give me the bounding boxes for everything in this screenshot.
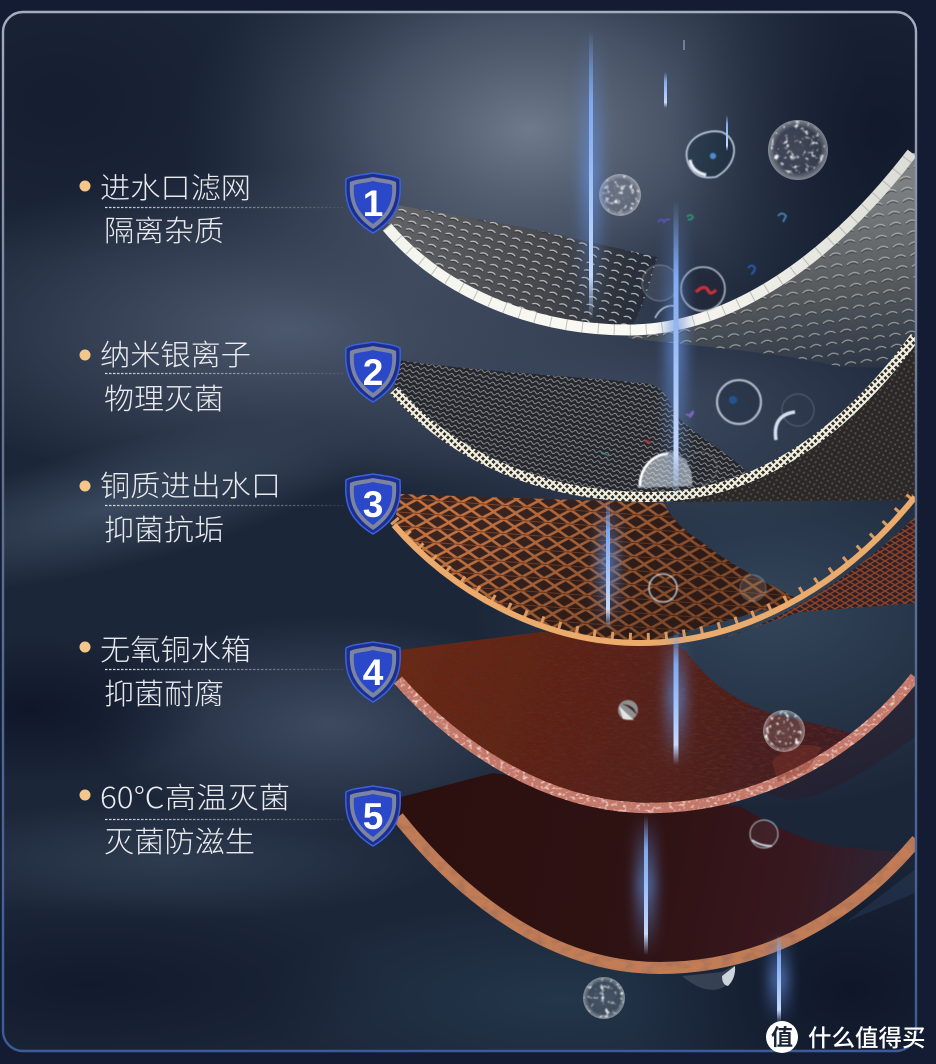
bullet — [80, 480, 90, 492]
description: 隔离杂质 — [104, 208, 224, 250]
bullet — [80, 180, 90, 192]
layer 1 edge — [387, 153, 912, 330]
heading: 无氧铜水箱 — [100, 627, 251, 669]
beam 2 — [666, 200, 686, 500]
bubble: ring on liner — [750, 820, 778, 848]
badge 2: 2 — [363, 352, 383, 393]
layer 2 right mesh — [660, 340, 917, 502]
layer 3: copper inlet and outlet mesh — [394, 492, 917, 645]
bubble: on copper mesh — [649, 574, 766, 602]
layer 4 edge — [398, 677, 915, 808]
badge 5 — [346, 786, 400, 846]
badge 4: 4 — [363, 652, 384, 693]
beam 6 — [769, 935, 789, 1023]
watermark icon — [766, 1021, 798, 1053]
leader line — [105, 206, 345, 208]
layer 1 underside mesh — [628, 153, 917, 368]
layer 1: inlet filter — [387, 153, 912, 332]
item 5 — [80, 775, 345, 861]
beam 1 — [581, 30, 601, 320]
description: 抑菌抗垢 — [104, 507, 224, 549]
heading: 纳米银离子 — [100, 332, 251, 374]
beam 5 — [636, 815, 656, 955]
item 3 — [80, 463, 345, 549]
bubble: textured on copper sheet — [763, 710, 805, 752]
heading: 铜质进出水口 — [100, 463, 281, 505]
badge 2 — [346, 342, 400, 402]
layer 2: nano silver mesh — [394, 337, 915, 497]
watermark — [766, 1021, 926, 1053]
layer 3 edge — [394, 497, 915, 643]
bubble: top center — [599, 174, 641, 216]
beam 3 — [598, 500, 618, 628]
badge 3 — [346, 474, 400, 534]
heading: 进水口滤网 — [100, 165, 251, 207]
droplet below liner — [722, 966, 735, 986]
item 2 — [80, 332, 345, 418]
layer 4 underside — [760, 682, 917, 800]
description: 灭菌防滋生 — [104, 819, 255, 861]
layer 1 perforation — [387, 205, 657, 332]
leader line — [105, 818, 345, 820]
layer 4: oxygen-free copper tank — [398, 632, 917, 808]
short beam top — [664, 40, 728, 151]
layer 3 right mesh — [716, 515, 917, 640]
beam 4 — [666, 630, 686, 765]
layer 1 surface — [387, 205, 657, 332]
description: 抑菌耐腐 — [104, 671, 224, 713]
badge 3: 3 — [363, 484, 383, 525]
bubble: top hollow — [686, 131, 734, 178]
watermark icon: 值 — [771, 1025, 793, 1050]
layer 2 surface — [394, 360, 745, 497]
bubble: second layer group — [717, 380, 814, 440]
bubble: on second mesh — [638, 452, 717, 488]
red residue — [772, 745, 822, 782]
leader line — [105, 372, 345, 374]
badge 4 — [346, 642, 400, 702]
droplet under layer 5 — [682, 965, 735, 990]
leader line — [105, 668, 345, 670]
layer 4 surface — [398, 632, 862, 808]
item 4 — [80, 627, 345, 713]
layer 3 shading — [458, 499, 794, 640]
layer 3 surface — [394, 494, 800, 645]
layer 2 woven edge — [394, 337, 915, 497]
leader line — [105, 504, 345, 506]
badge 5: 5 — [363, 796, 383, 837]
watermark text: 什么值得买 — [808, 1025, 926, 1051]
light beams — [581, 30, 789, 1023]
layer 5: heated inner liner — [398, 773, 917, 990]
layer 5 surface — [398, 773, 917, 968]
microbes — [601, 214, 786, 456]
bullet — [80, 350, 90, 360]
layer 5 edge — [398, 817, 917, 968]
badge 1 — [346, 173, 400, 233]
bubble: bottom — [583, 977, 625, 1019]
bubble: on first filter — [642, 265, 725, 318]
layer 3 teeth — [394, 492, 915, 638]
bubble: top right — [768, 120, 828, 180]
bubble: small on copper sheet — [618, 700, 638, 720]
badge 1: 1 — [363, 183, 383, 224]
layer 5 streaks — [846, 868, 917, 922]
description: 物理灭菌 — [104, 376, 224, 418]
item 1 — [80, 165, 345, 250]
bullet — [80, 790, 90, 800]
bullet — [80, 642, 90, 652]
heading: 60℃高温灭菌 — [100, 775, 290, 817]
layer 1 edge ribs — [387, 153, 912, 330]
